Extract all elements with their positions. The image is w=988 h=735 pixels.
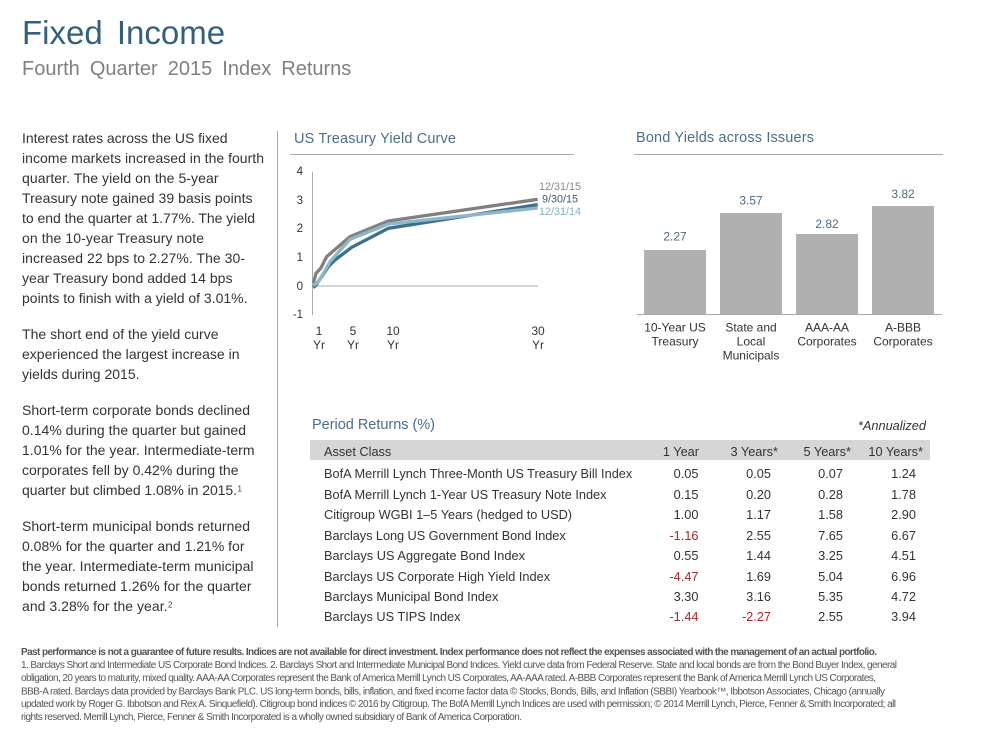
table row: 2.90 — [891, 507, 916, 522]
footnotes: Past performance is not a guarantee of future results. Indices are not available for direct investment. Index performance does not reflect the expenses associated with the management of an actual portfolio. — [21, 647, 877, 658]
y axis labels: -1 — [293, 309, 303, 321]
commentary text column: experienced the largest increase in — [22, 346, 240, 362]
bar chart — [637, 187, 942, 362]
table row: 4.51 — [891, 548, 916, 563]
bar labels: Treasury — [652, 334, 698, 348]
bar labels: Local — [737, 334, 765, 348]
subtitle: Fourth Quarter 2015 Index Returns — [22, 58, 351, 80]
bar labels: 10-Year US — [644, 320, 706, 334]
table row: 1.17 — [746, 507, 771, 522]
curve legend labels — [539, 181, 581, 218]
table row: 1.24 — [891, 466, 916, 481]
bar labels — [644, 320, 933, 362]
heading: US Treasury Yield Curve: US Treasury Yield Curve — [294, 131, 456, 147]
commentary text column: Interest rates across the US fixed — [22, 130, 228, 146]
curve legend labels: 12/31/15 — [539, 181, 581, 193]
bar labels: Corporates — [797, 334, 857, 348]
commentary text column: year Treasury bond added 14 bps — [22, 270, 232, 286]
curve legend labels: 12/31/14 — [539, 206, 581, 218]
table row — [324, 507, 916, 522]
commentary text column: Treasury note gained 39 basis points — [22, 190, 252, 206]
table row: -1.44 — [669, 609, 698, 624]
commentary text column: quarter. The yield on the 5-year — [22, 170, 219, 186]
table row: 0.05 — [674, 466, 698, 481]
table row: Barclays US Aggregate Bond Index — [324, 548, 526, 563]
y axis labels — [293, 166, 304, 321]
commentary text column: increased 22 bps to 2.27%. The 30- — [22, 250, 245, 266]
heading: Bond Yields across Issuers: Bond Yields across Issuers — [636, 130, 814, 146]
y axis labels: 3 — [297, 195, 303, 207]
x axis labels: Yr — [347, 338, 359, 352]
table header: 3 Years* — [730, 444, 778, 459]
table row — [324, 589, 916, 604]
title: Fixed Income — [22, 14, 225, 51]
table row: Barclays Long US Government Bond Index — [324, 528, 566, 543]
table row: 3.16 — [746, 589, 771, 604]
table row: 1.69 — [746, 569, 771, 584]
x axis labels: 1 — [316, 324, 323, 338]
commentary text column: yields during 2015. — [22, 366, 140, 382]
x axis labels: Yr — [532, 338, 544, 352]
panel: Bond yields across issuers — [634, 130, 943, 362]
panel: Period returns table — [310, 417, 930, 624]
table row: 0.28 — [818, 487, 843, 502]
table row: 0.07 — [818, 466, 843, 481]
x axis labels: Yr — [387, 338, 399, 352]
footnotes — [21, 647, 897, 723]
table row — [324, 609, 916, 624]
y axis labels: 4 — [297, 166, 304, 178]
table row: 6.96 — [891, 569, 916, 584]
table row: BofA Merrill Lynch Three-Month US Treasury Bill Index — [324, 466, 633, 481]
table row: 3.25 — [818, 548, 843, 563]
heading: Period Returns: Period Returns (%) — [312, 417, 435, 433]
bar values: 3.82 — [891, 187, 915, 201]
commentary text column: 0.08% for the quarter and 1.21% for — [22, 538, 245, 554]
commentary text column: and 3.28% for the year. — [22, 598, 168, 614]
footnotes: updated work by Roger G. Ibbotson and Rex A. Sinquefield). Citigroup bond indices © 2016 by Citigroup. The BofA Merrill Lynch Indices are used with permission; © 2014 Merrill Lynch, Pierce, Fenner & Smith Incorporated; all — [21, 699, 896, 710]
table row: Barclays Municipal Bond Index — [324, 589, 499, 604]
table row — [324, 528, 916, 543]
table row: 1.00 — [674, 507, 698, 522]
table row: 2.55 — [746, 528, 771, 543]
bar values: 2.27 — [663, 230, 687, 244]
commentary text column: The short end of the yield curve — [22, 326, 219, 342]
table row: 5.04 — [818, 569, 843, 584]
table row — [324, 569, 916, 584]
bar values: 3.57 — [739, 194, 763, 208]
table row: 4.72 — [891, 589, 916, 604]
table row: 6.67 — [891, 528, 916, 543]
footnotes: obligation, 20 years to maturity, mixed quality. AAA-AA Corporates represent the Bank of America Merrill Lynch US Corporates, AA-AAA rated. A-BBB Corporates represent the Bank of America Merrill Lynch US Corporates, — [21, 673, 876, 684]
table header: 5 Years* — [803, 444, 851, 459]
curves — [313, 199, 538, 288]
table row: BofA Merrill Lynch 1-Year US Treasury Note Index — [324, 487, 607, 502]
table row: 0.20 — [746, 487, 771, 502]
commentary text column: Short-term corporate bonds declined — [22, 402, 250, 418]
commentary text column: 1.01% for the year. Intermediate-term — [22, 442, 254, 458]
commentary text column: bonds returned 1.26% for the quarter — [22, 578, 252, 594]
commentary text column: on the 10-year Treasury note — [22, 230, 204, 246]
table row: -2.27 — [742, 609, 771, 624]
commentary text column: 0.14% during the quarter but gained — [22, 422, 246, 438]
bar labels: Corporates — [873, 334, 933, 348]
commentary text column: income markets increased in the fourth — [22, 150, 264, 166]
table row: 3.94 — [891, 609, 916, 624]
table header — [310, 440, 930, 460]
curve legend labels: 9/30/15 — [542, 194, 578, 206]
x axis labels: 30 — [531, 324, 545, 338]
y axis labels: 2 — [297, 223, 303, 235]
table header: 1 Year — [663, 444, 700, 459]
table row: Barclays US Corporate High Yield Index — [324, 569, 551, 584]
table row: 7.65 — [818, 528, 843, 543]
x axis labels: 5 — [350, 324, 357, 338]
table row — [324, 548, 916, 563]
bar labels: Municipals — [723, 348, 779, 362]
table row: 1.78 — [891, 487, 916, 502]
bar labels: A-BBB — [885, 320, 921, 334]
line chart — [293, 166, 581, 352]
footnotes: 1. Barclays Short and Intermediate US Corporate Bond Indices. 2. Barclays Short and Intermediate Municipal Bond Indices. Yield curve data from Federal Reserve. State and local bonds are from the Bond Buyer Index, general — [21, 660, 897, 671]
annualized note: *Annualized — [858, 418, 927, 433]
bar labels: State and — [725, 320, 777, 334]
table row: 2.55 — [818, 609, 843, 624]
commentary text column: the year. Intermediate-term municipal — [22, 558, 254, 574]
commentary text column: corporates fell by 0.42% during the — [22, 462, 239, 478]
table header: 10 Years* — [868, 444, 923, 459]
table row: 0.55 — [674, 548, 698, 563]
table row: -4.47 — [669, 569, 698, 584]
table row — [324, 466, 916, 481]
commentary text column: to end the quarter at 1.77%. The yield — [22, 210, 255, 226]
footnotes: rights reserved. Merrill Lynch, Pierce, Fenner & Smith Incorporated is a wholly owned subsidiary of Bank of America Corporation. — [21, 712, 522, 723]
commentary text column: 1 — [238, 484, 242, 494]
table row: 0.15 — [674, 487, 698, 502]
y axis labels: 1 — [297, 252, 303, 264]
table header: Asset Class — [324, 444, 391, 459]
bar values: 2.82 — [815, 217, 839, 231]
y axis labels: 0 — [297, 281, 303, 293]
x axis labels: Yr — [313, 338, 325, 352]
table row: 1.44 — [746, 548, 771, 563]
table row: 3.30 — [674, 589, 698, 604]
footnotes: BBB-A rated. Barclays data provided by Barclays Bank PLC. US long-term bonds, bills, inflation, and fixed income factor data © Stocks, Bonds, Bills, and Inflation (SBBI) Yearbook™, Ibbotson Associates, Chicago (annually — [21, 686, 885, 698]
commentary text column: Short-term municipal bonds returned — [22, 518, 250, 534]
commentary text column: quarter but climbed 1.08% in 2015. — [22, 482, 237, 498]
bar labels: AAA-AA — [805, 320, 849, 334]
x axis labels — [313, 324, 545, 352]
bar values — [663, 187, 915, 244]
table row: Barclays US TIPS Index — [324, 609, 461, 624]
table row — [324, 487, 916, 502]
table row: 5.35 — [818, 589, 843, 604]
x axis labels: 10 — [386, 324, 400, 338]
table row: Citigroup WGBI 1–5 Years (hedged to USD) — [324, 507, 572, 522]
commentary text column — [22, 130, 264, 614]
table row: 1.58 — [818, 507, 843, 522]
commentary text column: points to finish with a yield of 3.01%. — [22, 290, 248, 306]
table row: 0.05 — [746, 466, 771, 481]
commentary text column: 2 — [168, 600, 173, 610]
table row: -1.16 — [669, 528, 698, 543]
panel: US Treasury yield curve — [290, 131, 581, 352]
